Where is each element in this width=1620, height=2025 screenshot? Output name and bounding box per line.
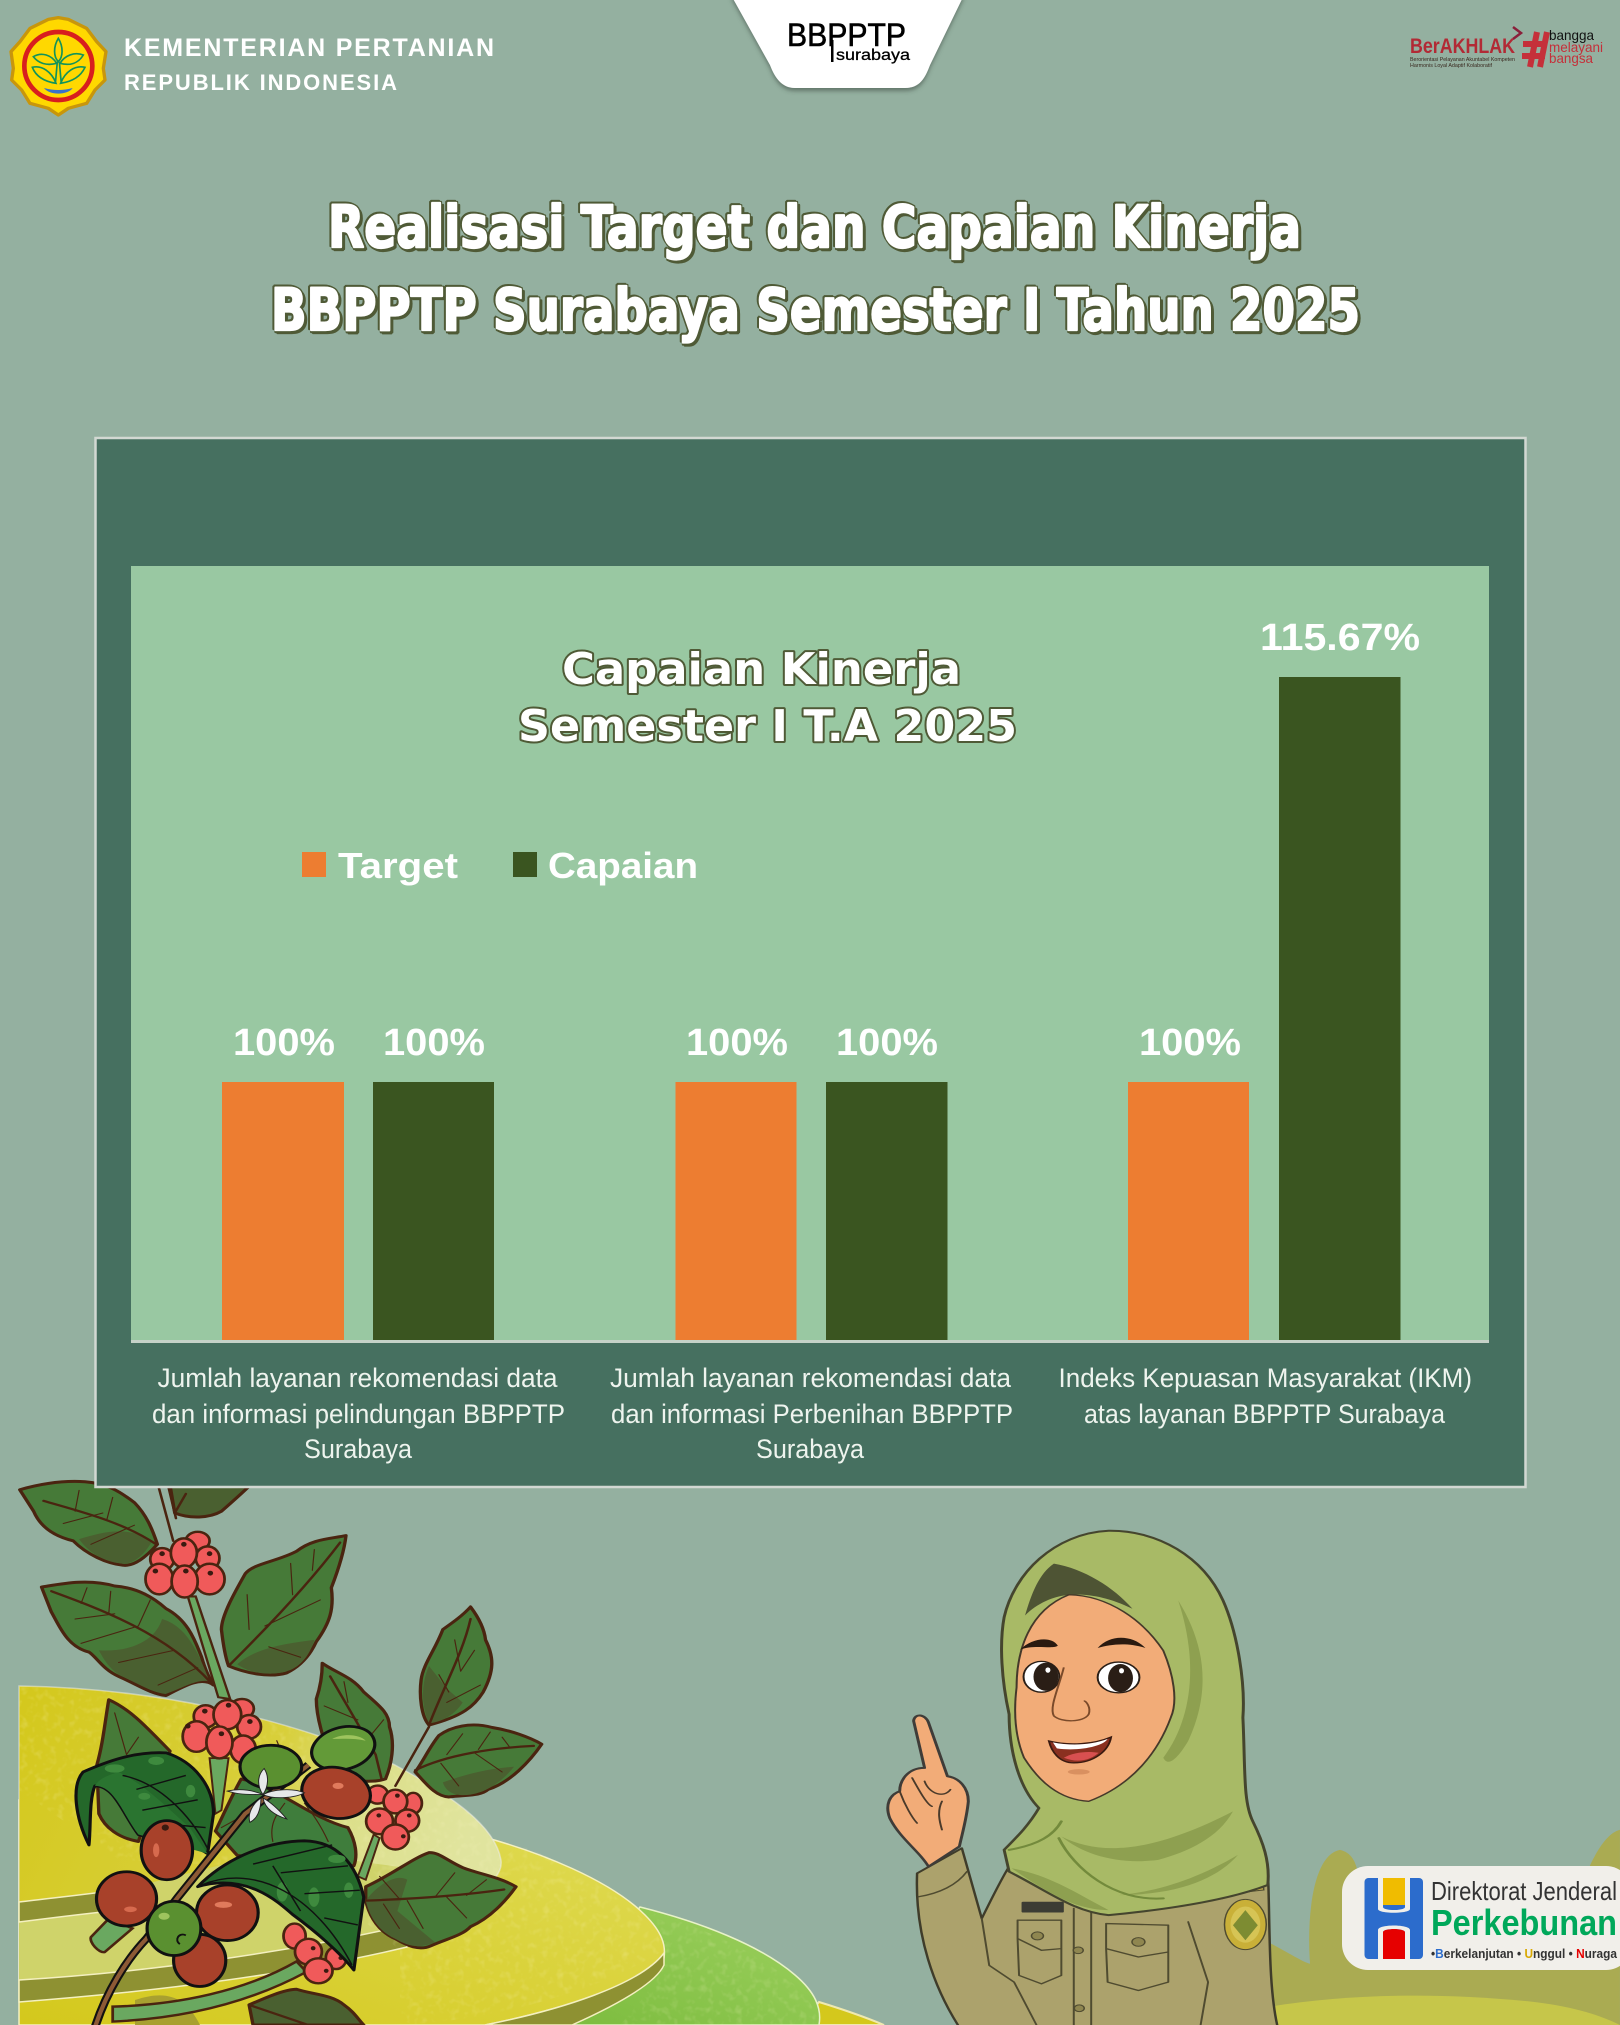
- bars: category 1: [222, 1022, 494, 1340]
- category label 3: [1058, 1363, 1472, 1429]
- bars: category 2: 100%: [686, 1022, 788, 1064]
- ministry name: REPUBLIK INDONESIA: [124, 70, 397, 95]
- legend: Capaian: [548, 845, 698, 886]
- leaf: right: [415, 1725, 542, 1797]
- leaf: upper right: [395, 1607, 492, 1786]
- BerAKHLAK logo: [1410, 27, 1603, 69]
- centre tab logo BBPPTP: [731, 0, 964, 88]
- top stems: [158, 1485, 176, 1541]
- bars: category 3: 115.67%: [1260, 617, 1420, 659]
- disc rim: [485, 1953, 664, 2025]
- main title: [271, 193, 1360, 344]
- ministry emblem: [11, 18, 106, 115]
- name tag: [1022, 1902, 1064, 1912]
- eyes: [1024, 1661, 1139, 1693]
- uniform: [917, 1848, 1278, 2025]
- chart panel: [96, 438, 1526, 1487]
- BerAKHLAK logo: bangsa: [1549, 50, 1593, 66]
- Ditjen Perkebunan logo: •Berkelanjutan • Unggul • Nuraga: [1431, 1946, 1618, 1961]
- bars: category 1: 100%: [233, 1022, 335, 1064]
- green stem: [188, 1596, 230, 1699]
- bars: category 2: [676, 1022, 948, 1340]
- berry cluster: top: [146, 1532, 225, 1597]
- hijab shadow folds: [1012, 1600, 1238, 1910]
- leaf: bottom: [249, 1989, 364, 2025]
- nose: [1053, 1667, 1089, 1721]
- leaf: lower right: [366, 1853, 516, 1948]
- legend: [302, 845, 698, 886]
- category label 3: atas layanan BBPPTP Surabaya: [1084, 1399, 1446, 1429]
- chart plot background: [131, 566, 1489, 1340]
- BerAKHLAK logo: melayani: [1549, 39, 1603, 55]
- axis line: [131, 1340, 1489, 1343]
- face: [1015, 1595, 1174, 1801]
- hijab fold lines: [1009, 1821, 1163, 1899]
- eyebrows: [1020, 1638, 1145, 1650]
- centre tab logo BBPPTP: BBPPTP: [787, 17, 906, 53]
- berry cluster: middle: [183, 1699, 261, 1763]
- leaf: large right: [221, 1536, 346, 1675]
- coffee flower: [227, 1769, 304, 1822]
- chart title: Semester I T.A 2025: [518, 701, 1017, 752]
- badge: [1224, 1899, 1266, 1950]
- branch: [95, 1765, 308, 2025]
- legend: Target: [338, 845, 458, 886]
- bars: category 1: 100%: [383, 1022, 485, 1064]
- centre tab logo BBPPTP: surabaya: [836, 47, 910, 64]
- leaf: top centre: [170, 1485, 248, 1517]
- pockets: [1018, 1920, 1168, 1990]
- chart title: [518, 644, 1017, 752]
- green disc: [560, 1907, 820, 2025]
- bars: category 2: 100%: [836, 1022, 938, 1064]
- shoulder patch: [1218, 1880, 1264, 1898]
- category label 1: dan informasi pelindungan BBPPTP: [152, 1399, 565, 1429]
- BerAKHLAK logo: BerAKHLAK: [1410, 35, 1515, 58]
- berry cluster: right: [366, 1786, 422, 1849]
- category label 1: [152, 1363, 565, 1464]
- BerAKHLAK logo: Berorientasi Pelayanan Akuntabel Kompeten: [1410, 57, 1515, 63]
- Ditjen Perkebunan logo: [1342, 1866, 1620, 1970]
- category label 2: [610, 1363, 1013, 1464]
- bars: category 3: 100%: [1139, 1022, 1241, 1064]
- mouth: [1049, 1737, 1111, 1775]
- main title: BBPPTP Surabaya Semester I Tahun 2025: [271, 276, 1360, 344]
- logo mark: [1364, 1878, 1423, 1959]
- yellow disc: [19, 1800, 664, 2025]
- layered platform discs: [19, 1686, 884, 2025]
- main title: Realisasi Target dan Capaian Kinerja: [328, 193, 1301, 261]
- dark leaf: right: [198, 1841, 364, 1970]
- category label 2: Surabaya: [756, 1434, 865, 1464]
- dark leaf: left: [76, 1753, 214, 1854]
- speckle texture: [19, 1686, 664, 2025]
- bars: category 3: [1128, 617, 1420, 1340]
- BerAKHLAK logo: bangga: [1549, 27, 1594, 43]
- BerAKHLAK logo: Harmonis Loyal Adaptif Kolaboratif: [1410, 63, 1492, 69]
- category label 3: Indeks Kepuasan Masyarakat (IKM): [1058, 1363, 1472, 1393]
- category label 1: Jumlah layanan rekomendasi data: [158, 1363, 558, 1393]
- leaf: large left: [42, 1582, 214, 1696]
- lower green stems: [91, 1758, 380, 2022]
- category label 2: Jumlah layanan rekomendasi data: [610, 1363, 1012, 1393]
- category label 1: Surabaya: [304, 1434, 413, 1464]
- chart title: Capaian Kinerja: [562, 644, 961, 695]
- under scarf: [1025, 1564, 1132, 1616]
- category label 2: dan informasi Perbenihan BBPPTP: [611, 1399, 1013, 1429]
- leaf: left behind dark leaf: [97, 1700, 170, 1842]
- ministry name: [124, 34, 494, 95]
- ministry name: KEMENTERIAN PERTANIAN: [124, 34, 494, 62]
- leaf: centre behind: [215, 1741, 356, 1866]
- coffee plant illustration: [20, 1481, 542, 2025]
- leaf: right middle: [316, 1663, 392, 1781]
- leaf: top left: [20, 1481, 157, 1565]
- pointing hand: [888, 1715, 968, 1867]
- pale stripe and upper disc: [19, 1686, 501, 1980]
- berry cluster: bottom: [284, 1924, 346, 1983]
- hijab: [1002, 1531, 1268, 1915]
- decorative hills, bottom right: [1188, 1830, 1620, 2025]
- character: woman in hijab pointing: [888, 1531, 1278, 2025]
- coffee cherries: [96, 1719, 382, 1986]
